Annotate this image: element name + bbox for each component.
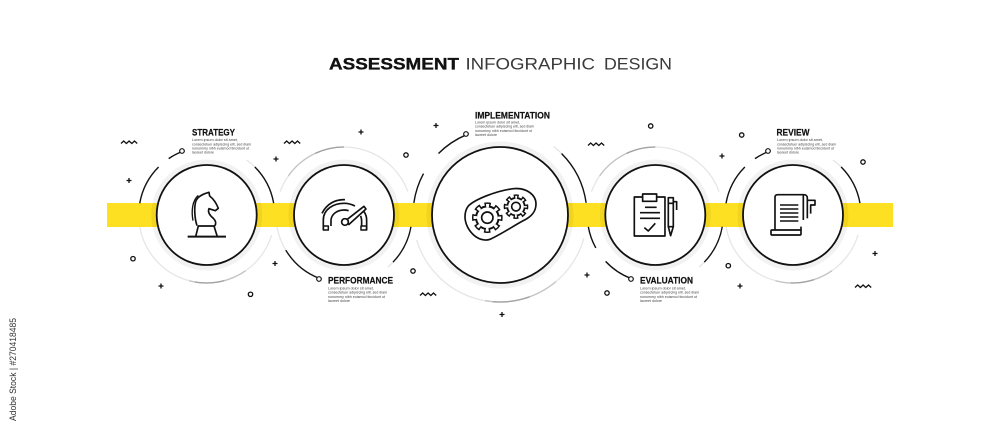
label: review: REVIEW bbox=[776, 128, 810, 138]
panel: strategy bbox=[111, 119, 303, 311]
connector dot: strategy bbox=[180, 149, 184, 153]
label: implementation: nonummy nibh euismod tincidunt ut bbox=[475, 128, 533, 133]
label: implementation: consectetuer adipiscing elit, sed diam bbox=[475, 124, 535, 129]
label: evaluation: consectetuer adipiscing elit, sed diam bbox=[640, 290, 700, 295]
main circle: performance bbox=[291, 162, 397, 268]
decorative small rings bbox=[131, 124, 865, 296]
label: implementation: Lorem ipsum dolor sit amet, bbox=[475, 120, 520, 124]
outer ring arcs: evaluation bbox=[559, 119, 751, 311]
small gear bbox=[506, 197, 526, 217]
connector dot: implementation bbox=[464, 132, 468, 136]
panel: evaluation bbox=[559, 119, 751, 311]
main circle: review bbox=[740, 162, 846, 268]
label: performance: consectetuer adipiscing elit, sed diam bbox=[328, 290, 388, 295]
icon: document scroll bbox=[771, 195, 815, 235]
label: evaluation: Lorem ipsum dolor sit amet, bbox=[640, 286, 686, 290]
connector dot: review bbox=[766, 149, 770, 153]
label: implementation: laoreet dolore bbox=[475, 132, 498, 137]
connector dot: evaluation bbox=[629, 277, 633, 281]
decorative plus signs bbox=[126, 123, 878, 317]
label: review: laoreet dolore bbox=[777, 150, 800, 155]
icon: chess knight bbox=[188, 192, 226, 237]
icon: speedometer gauge bbox=[322, 200, 367, 230]
label: evaluation: EVALUATION bbox=[640, 276, 693, 286]
label: evaluation: laoreet dolore bbox=[640, 298, 663, 303]
label: strategy: nonummy nibh euismod tincidunt ut bbox=[192, 146, 250, 150]
label: evaluation bbox=[640, 276, 700, 303]
main circle: evaluation bbox=[602, 162, 708, 268]
outer ring arcs: review bbox=[697, 119, 889, 311]
label: performance bbox=[328, 276, 393, 303]
title: DESIGN bbox=[604, 54, 672, 74]
icon: clipboard and pen bbox=[634, 194, 677, 236]
label: evaluation: nonummy nibh euismod tincidunt ut bbox=[640, 294, 698, 299]
main circle: strategy bbox=[154, 162, 260, 268]
outer ring arcs: implementation bbox=[377, 92, 623, 338]
icon: gears in capsule bbox=[465, 189, 536, 240]
label: performance: Lorem ipsum dolor sit amet, bbox=[328, 286, 374, 290]
outer ring arcs: performance bbox=[248, 119, 440, 311]
large gear bbox=[475, 205, 500, 230]
connector dot: performance bbox=[317, 277, 321, 281]
label: review: consectetuer adipiscing elit, sed diam bbox=[777, 141, 837, 146]
panel: review bbox=[697, 119, 889, 311]
yellow timeline band bbox=[107, 203, 893, 227]
label: implementation: IMPLEMENTATION bbox=[475, 110, 550, 120]
title bbox=[329, 54, 672, 74]
label: strategy: consectetuer adipiscing elit, sed diam bbox=[192, 141, 252, 146]
label: review: nonummy nibh euismod tincidunt ut bbox=[777, 146, 835, 150]
outer ring arcs: strategy bbox=[111, 119, 303, 311]
title: INFOGRAPHIC bbox=[466, 54, 595, 74]
label: performance: laoreet dolore bbox=[328, 298, 351, 303]
label: performance: nonummy nibh euismod tincidunt ut bbox=[328, 294, 386, 299]
panel: performance bbox=[248, 119, 440, 311]
label: review: Lorem ipsum dolor sit amet, bbox=[777, 137, 823, 142]
main circle: implementation bbox=[429, 144, 571, 286]
title: ASSESSMENT bbox=[329, 54, 460, 74]
decorative zigzags bbox=[121, 141, 871, 296]
label: strategy bbox=[192, 128, 252, 155]
label: performance: PERFORMANCE bbox=[328, 276, 393, 286]
label: review bbox=[776, 128, 837, 155]
label: strategy: Lorem ipsum dolor sit amet, bbox=[192, 137, 238, 142]
label: implementation bbox=[475, 110, 550, 137]
label: strategy: STRATEGY bbox=[192, 128, 235, 138]
label: strategy: laoreet dolore bbox=[192, 150, 215, 155]
panel: implementation bbox=[377, 92, 623, 338]
image credit: Adobe Stock | #270418485 bbox=[8, 318, 19, 421]
